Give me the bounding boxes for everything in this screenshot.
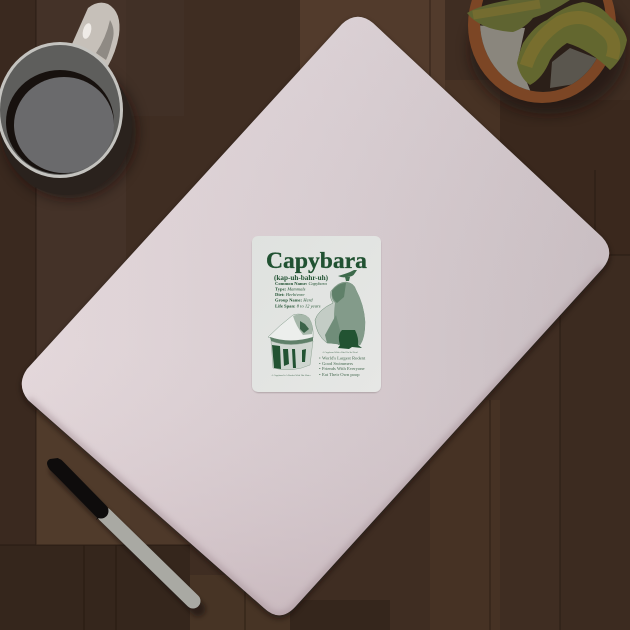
fact list: Common Name: Capybara bbox=[275, 281, 328, 286]
fact list: Group Name: Herd bbox=[275, 298, 313, 303]
sticker bbox=[252, 236, 381, 393]
cactus pot bbox=[467, 0, 627, 114]
illustration caption left: A Capybara In A Bucket With Hot Water bbox=[272, 374, 311, 377]
illustration: capybara with bird bbox=[315, 270, 365, 349]
marker cap bbox=[47, 458, 105, 520]
sticker title: Capybara bbox=[266, 248, 367, 274]
bullet list: • bbox=[319, 372, 321, 377]
fact list bbox=[275, 281, 328, 308]
cactus arms bbox=[467, 0, 570, 32]
bullet list: Friends With Everyone bbox=[322, 366, 365, 371]
mug body bbox=[0, 57, 132, 195]
fact list: Life Span: 8 to 12 years bbox=[275, 303, 321, 308]
fact list: Type: Mammals bbox=[275, 287, 306, 292]
illustration caption right: A Capybara With a Bird On Its Head bbox=[322, 351, 358, 354]
illustration: capybara in bucket bbox=[268, 314, 313, 370]
bullet list: • bbox=[319, 366, 321, 371]
bullet list: • bbox=[319, 356, 321, 360]
bullet list: • bbox=[319, 361, 321, 366]
pronunciation: (kap-uh-bahr-uh) bbox=[274, 274, 329, 282]
bullet list: World's Largest Rodent bbox=[322, 356, 366, 360]
marker barrel bbox=[105, 515, 193, 601]
bullet list: Good Swimmers bbox=[322, 361, 353, 366]
marker pen bbox=[47, 458, 198, 609]
fact list: Diet: Herbivore bbox=[275, 292, 305, 297]
bullet list bbox=[319, 356, 366, 377]
mug handle bbox=[72, 3, 120, 66]
coffee mug bbox=[0, 3, 136, 198]
bird bbox=[338, 270, 357, 277]
bullet list: Eat Their Own poop bbox=[322, 372, 360, 377]
